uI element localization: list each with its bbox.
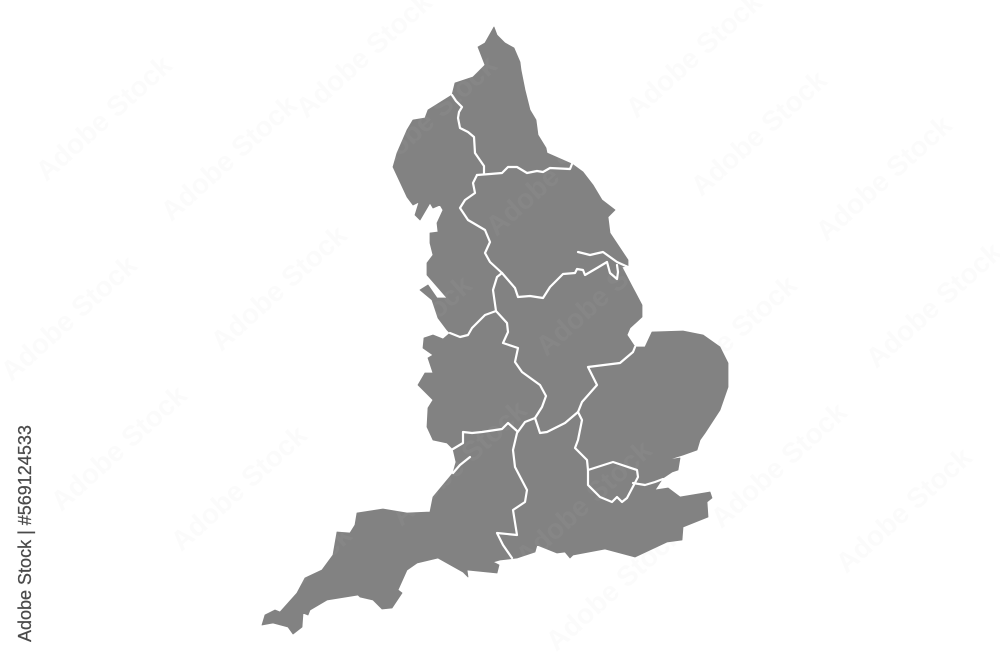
border: East Midlands / East of England — [578, 347, 635, 412]
border: North East / North West — [452, 95, 484, 174]
watermarks over map: Adobe Stock — [385, 394, 533, 532]
map of England — [262, 27, 728, 634]
watermarks over map: Adobe Stock — [530, 224, 678, 362]
border: West Midlands / South West — [453, 423, 517, 449]
river: Humber — [578, 252, 628, 267]
watermarks on white background: Adobe Stock — [705, 396, 853, 534]
watermarks on white background: Adobe Stock — [810, 109, 958, 247]
watermarks on white background: Adobe Stock — [45, 379, 193, 517]
regional borders — [450, 95, 663, 558]
river: Severn estuary — [453, 457, 470, 473]
border: North West / Yorkshire — [460, 175, 502, 273]
river: Thames — [633, 479, 663, 485]
watermarks over map — [210, 49, 678, 657]
border: North East / Yorkshire — [477, 164, 572, 175]
watermarks on white background: Adobe Stock — [830, 441, 978, 579]
watermarks over map: Adobe Stock — [480, 104, 628, 242]
watermarks over map: Adobe Stock — [210, 519, 358, 657]
watermarks on white background: Adobe Stock — [540, 519, 688, 657]
border: South East / East of England — [575, 412, 588, 470]
landmass outline — [262, 27, 728, 634]
watermarks on white background: Adobe Stock — [30, 49, 178, 187]
border: Greater London — [588, 462, 638, 502]
watermarks on white background: Adobe Stock — [685, 64, 833, 202]
watermarks on white background: Adobe Stock — [155, 89, 303, 227]
border: North West / West Midlands — [450, 273, 502, 337]
watermarks on white background: Adobe Stock — [655, 269, 803, 407]
watermarks on white background: Adobe Stock — [165, 419, 313, 557]
border: Yorkshire / East Midlands — [502, 262, 618, 298]
watermarks on white background: Adobe Stock — [205, 219, 353, 357]
watermarks over map: Adobe Stock — [355, 49, 503, 187]
stock image id text: Adobe Stock | #569124533 — [15, 425, 35, 642]
watermarks over map: Adobe Stock — [330, 269, 478, 407]
border: West Midlands / East Midlands — [496, 311, 546, 418]
border: East Midlands / South East — [535, 412, 578, 433]
border: South West / South East — [497, 418, 535, 558]
watermarks over map: Adobe Stock — [510, 434, 658, 572]
